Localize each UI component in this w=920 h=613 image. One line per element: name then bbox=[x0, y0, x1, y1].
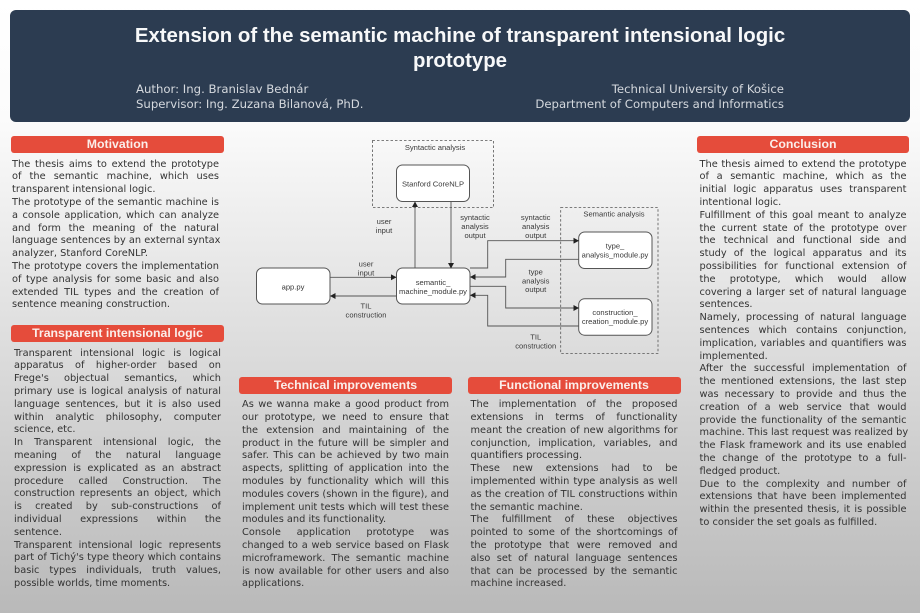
text block: Transparent intensional logic: within analytic philosophy, computer bbox=[14, 412, 221, 423]
text block: Transparent intensional logic: meaning of the natural language bbox=[14, 450, 221, 461]
title bbox=[135, 25, 785, 72]
group: syntactic analysis bbox=[372, 140, 494, 208]
heading: Functional improvements: Functional improvements bbox=[499, 378, 649, 392]
text block: Transparent intensional logic: expression is explicated as an abstract bbox=[14, 463, 221, 474]
text block: Functional improvements: implemented within type analysis as well bbox=[470, 476, 678, 487]
text block: Transparent intensional logic: possible worlds, time moments. bbox=[14, 578, 170, 589]
text block: Technical improvements bbox=[242, 399, 449, 589]
text block: Functional improvements: These new extensions had to be bbox=[470, 463, 678, 474]
text block: Conclusion: After the successful implementation of bbox=[700, 363, 906, 374]
text block: Motivation: sentence meaning construction. bbox=[12, 299, 170, 310]
university and department: Department of Computers and Informatics bbox=[535, 96, 784, 110]
heading: Technical improvements bbox=[239, 376, 452, 394]
text block: Motivation: and form the meaning of the natural bbox=[12, 223, 219, 234]
text block: Functional improvements: the semantic machine. bbox=[470, 502, 583, 513]
heading: Motivation: Motivation bbox=[87, 137, 148, 151]
header banner bbox=[10, 10, 910, 122]
text block: Functional improvements: The fulfillment of these objectives bbox=[470, 514, 678, 525]
arrow labels: input bbox=[358, 268, 375, 278]
heading: Technical improvements: Technical improvements bbox=[274, 378, 417, 392]
text block: Conclusion: Namely, processing of natural language bbox=[700, 312, 906, 323]
text block: Conclusion: implication, variables and quantifiers was bbox=[700, 338, 906, 349]
text block: Motivation: The prototype of the semantic machine is bbox=[12, 197, 219, 208]
text block: Transparent intensional logic: Frege's objectual semantics, which bbox=[14, 373, 221, 384]
arrow labels: analysis bbox=[522, 276, 550, 286]
text block: Motivation bbox=[12, 159, 220, 310]
group: syntactic analysis: Syntactic analysis bbox=[405, 143, 465, 152]
author and supervisor: Author: Ing. Branislav Bednár bbox=[136, 82, 308, 96]
arrow labels: output bbox=[525, 285, 547, 294]
text block: Motivation: The prototype covers the implementation bbox=[12, 261, 219, 272]
text block: Technical improvements: applications. bbox=[242, 578, 304, 589]
text block: Technical improvements: the extension and maintaining of the bbox=[242, 425, 449, 436]
text block: Technical improvements: is now available for other users and also bbox=[242, 566, 449, 577]
text block: Technical improvements: safer. This can be achieved by two main bbox=[242, 450, 449, 461]
module: semantic machine bbox=[396, 268, 470, 304]
text block: Functional improvements: also set of natural language sentences bbox=[470, 553, 678, 564]
text block: Conclusion: the current state of the prototype over bbox=[700, 223, 906, 234]
arrow labels: syntactic bbox=[460, 213, 490, 222]
text block: Motivation: extended TIL types and the creation of bbox=[12, 287, 219, 298]
university and department: Technical University of Košice bbox=[612, 82, 784, 96]
text block: Transparent intensional logic: procedure called Construction. The bbox=[14, 476, 221, 487]
module: semantic machine: semantic_ bbox=[416, 278, 451, 287]
text block: Conclusion: the Flask framework and its use enabled bbox=[700, 440, 906, 451]
text block: Conclusion: the technical and functional side and bbox=[700, 235, 906, 246]
text block: Conclusion: sentences. bbox=[700, 299, 753, 310]
heading: Transparent intensional logic: Transparent intensional logic bbox=[32, 326, 203, 340]
text block: Motivation: language sentences by an external syntax bbox=[12, 235, 220, 246]
text block: Motivation: of the semantic machine, which uses bbox=[12, 171, 219, 182]
module: semantic machine: machine_module.py bbox=[399, 287, 467, 296]
text block: Functional improvements bbox=[470, 399, 678, 589]
text block: Technical improvements: implement unit tests which will test these bbox=[242, 502, 449, 513]
text block: Functional improvements: that can be processed by the semantic bbox=[470, 566, 678, 577]
text block: Transparent intensional logic: science, etc. bbox=[14, 424, 75, 435]
arrow labels: construction bbox=[346, 310, 386, 320]
text block: Conclusion: Fulfillment of this goal meant to analyze bbox=[700, 210, 906, 221]
arrow labels: analysis bbox=[461, 222, 489, 231]
text block: Conclusion: Due to the complexity and number of bbox=[700, 479, 906, 490]
author and supervisor: Supervisor: Ing. Zuzana Bilanová, PhD. bbox=[136, 96, 364, 110]
text block: Conclusion: initial logic apparatus uses transparent bbox=[700, 184, 906, 195]
text block: Transparent intensional logic: is created by sub-constructions of bbox=[14, 501, 221, 512]
text block: Conclusion: the prototype, which would allow bbox=[700, 274, 906, 285]
text block: Technical improvements: microframework. The semantic machine bbox=[242, 553, 449, 564]
university and department bbox=[535, 82, 784, 110]
text block: Transparent intensional logic: primary use is logical analysis of natural bbox=[14, 386, 221, 397]
text block: Conclusion: implemented. bbox=[700, 351, 768, 362]
text block: Conclusion: extensions that have been implemented bbox=[700, 491, 906, 502]
text block: Conclusion bbox=[699, 159, 908, 528]
text block: Functional improvements: the prototype that were removed and bbox=[470, 540, 678, 551]
text block: Motivation: The thesis aims to extend the prototype bbox=[12, 159, 219, 170]
text block: Conclusion: the change of the prototype to a full- bbox=[700, 453, 906, 464]
arrow labels bbox=[346, 213, 556, 350]
module: app.py: app.py bbox=[282, 282, 305, 292]
text block: Conclusion: covering a larger set of natural language bbox=[700, 287, 906, 298]
text block: Technical improvements: aspects, splitting of application into the bbox=[242, 463, 449, 474]
text block: Conclusion: was necessary to provide and thus the bbox=[700, 389, 906, 400]
text block: Conclusion: fledged product. bbox=[700, 466, 780, 477]
text block: Transparent intensional logic bbox=[14, 348, 222, 589]
text block: Transparent intensional logic: individual expressions within the bbox=[14, 514, 221, 525]
text block: Technical improvements: Console application prototype was bbox=[242, 527, 449, 538]
text block: Transparent intensional logic: Transparent intensional logic is logical bbox=[14, 348, 221, 359]
module: app.py bbox=[256, 268, 330, 304]
text block: Functional improvements: extensions in terms of functionality bbox=[470, 412, 678, 423]
text block: Transparent intensional logic: part of Tichý's type theory which contains bbox=[14, 552, 221, 563]
arrow labels: user bbox=[359, 260, 374, 268]
arrow labels: type bbox=[529, 268, 543, 276]
text block: Conclusion: study of the logical apparatus and its bbox=[700, 248, 906, 259]
group: semantic analysis: construction_ bbox=[592, 308, 638, 317]
text block: Conclusion: of a semantic machine, which as the bbox=[700, 171, 906, 182]
text block: Conclusion: to consider the set goals as fulfilled. bbox=[700, 517, 877, 528]
text block: Motivation: of type analysis for some basic and also bbox=[12, 274, 219, 285]
text block: Technical improvements: modules and its functionality. bbox=[242, 514, 386, 525]
text block: Functional improvements: conjunction, implication, variables, and bbox=[470, 438, 678, 449]
text block: Motivation: analyzer, Stanford CoreNLP. bbox=[12, 248, 148, 259]
group: semantic analysis: creation_module.py bbox=[582, 317, 648, 326]
text block: Conclusion: machine. This last request was realized by bbox=[700, 427, 908, 438]
text block: Technical improvements: changed to a web service based on Flask bbox=[242, 540, 449, 551]
text block: Technical improvements: modules by functionality which will this bbox=[242, 476, 449, 487]
group: syntactic analysis: Stanford CoreNLP bbox=[402, 179, 464, 188]
text block: Transparent intensional logic: apparatus of higher-order based on bbox=[14, 360, 221, 371]
text block: Conclusion: The thesis aimed to extend the prototype bbox=[700, 159, 906, 170]
text block: Transparent intensional logic: In Transparent intensional logic, the bbox=[14, 437, 221, 448]
text block: Motivation: transparent intensional logic. bbox=[12, 184, 155, 195]
title: prototype bbox=[413, 50, 507, 72]
text block: Technical improvements: product in the future will be simpler and bbox=[242, 438, 449, 449]
author and supervisor bbox=[136, 82, 364, 110]
arrow labels: output bbox=[525, 231, 547, 240]
arrow labels: syntactic bbox=[521, 213, 551, 222]
arrow labels: construction bbox=[515, 342, 556, 350]
arrow labels: input bbox=[376, 226, 393, 235]
arrow labels: analysis bbox=[522, 222, 550, 231]
title: Extension of the semantic machine of transparent intensional logic bbox=[135, 25, 785, 47]
group: semantic analysis bbox=[561, 208, 658, 354]
text block: Conclusion: possibilities for functional extension of bbox=[700, 261, 906, 272]
text block: Functional improvements: as the creation of TIL constructions within bbox=[470, 489, 678, 500]
text block: Transparent intensional logic: sentence. bbox=[14, 527, 62, 538]
arrow labels: user bbox=[377, 217, 392, 226]
text block: Conclusion: within the presented thesis, it is possible bbox=[700, 504, 906, 515]
group: semantic analysis: Semantic analysis bbox=[583, 210, 645, 218]
text block: Technical improvements: our prototype, we need to ensure that bbox=[242, 412, 449, 423]
arrows bbox=[330, 202, 579, 326]
text block: Transparent intensional logic: language sentences, but it is also used bbox=[14, 399, 221, 410]
arrow labels: TIL bbox=[530, 332, 541, 342]
arrow labels: TIL bbox=[361, 302, 371, 310]
text block: Functional improvements: pointed to some of the shortcomings of bbox=[470, 527, 678, 538]
text block: Conclusion: provide the functionality of the semantic bbox=[700, 415, 906, 426]
text block: Functional improvements: machine increased. bbox=[470, 578, 566, 589]
group: semantic analysis: analysis_module.py bbox=[582, 250, 649, 260]
text block: Conclusion: intentional logic. bbox=[700, 197, 781, 208]
text block: Transparent intensional logic: construction represents an object, which bbox=[14, 488, 221, 499]
text block: Functional improvements: The implementation of the proposed bbox=[470, 399, 678, 410]
text block: Conclusion: sentences which contains conjunction, bbox=[700, 325, 906, 336]
text block: Technical improvements: As we wanna make a good product from bbox=[242, 399, 449, 410]
text block: Transparent intensional logic: basic types individuals, truth values, bbox=[14, 565, 221, 576]
heading: Functional improvements bbox=[468, 376, 680, 394]
text block: Conclusion: the mentioned extensions, the last step bbox=[700, 376, 906, 387]
group: semantic analysis: type_ bbox=[606, 242, 625, 250]
text block: Technical improvements: modules covers (shown in the figure), and bbox=[242, 489, 449, 500]
arrow labels: output bbox=[464, 231, 486, 240]
heading: Conclusion: Conclusion bbox=[770, 137, 836, 151]
heading: Conclusion bbox=[697, 136, 909, 153]
text block: Conclusion: creation of a web service that would bbox=[700, 402, 906, 413]
text block: Transparent intensional logic: Transparent intensional logic represents bbox=[14, 540, 221, 551]
text block: Functional improvements: meant the creation of new algorithms for bbox=[470, 425, 678, 436]
text block: Motivation: a console application, which can analyze bbox=[12, 210, 219, 221]
heading: Motivation bbox=[11, 136, 224, 153]
text block: Functional improvements: quantifiers processing. bbox=[470, 450, 582, 461]
heading: Transparent intensional logic bbox=[11, 325, 224, 342]
